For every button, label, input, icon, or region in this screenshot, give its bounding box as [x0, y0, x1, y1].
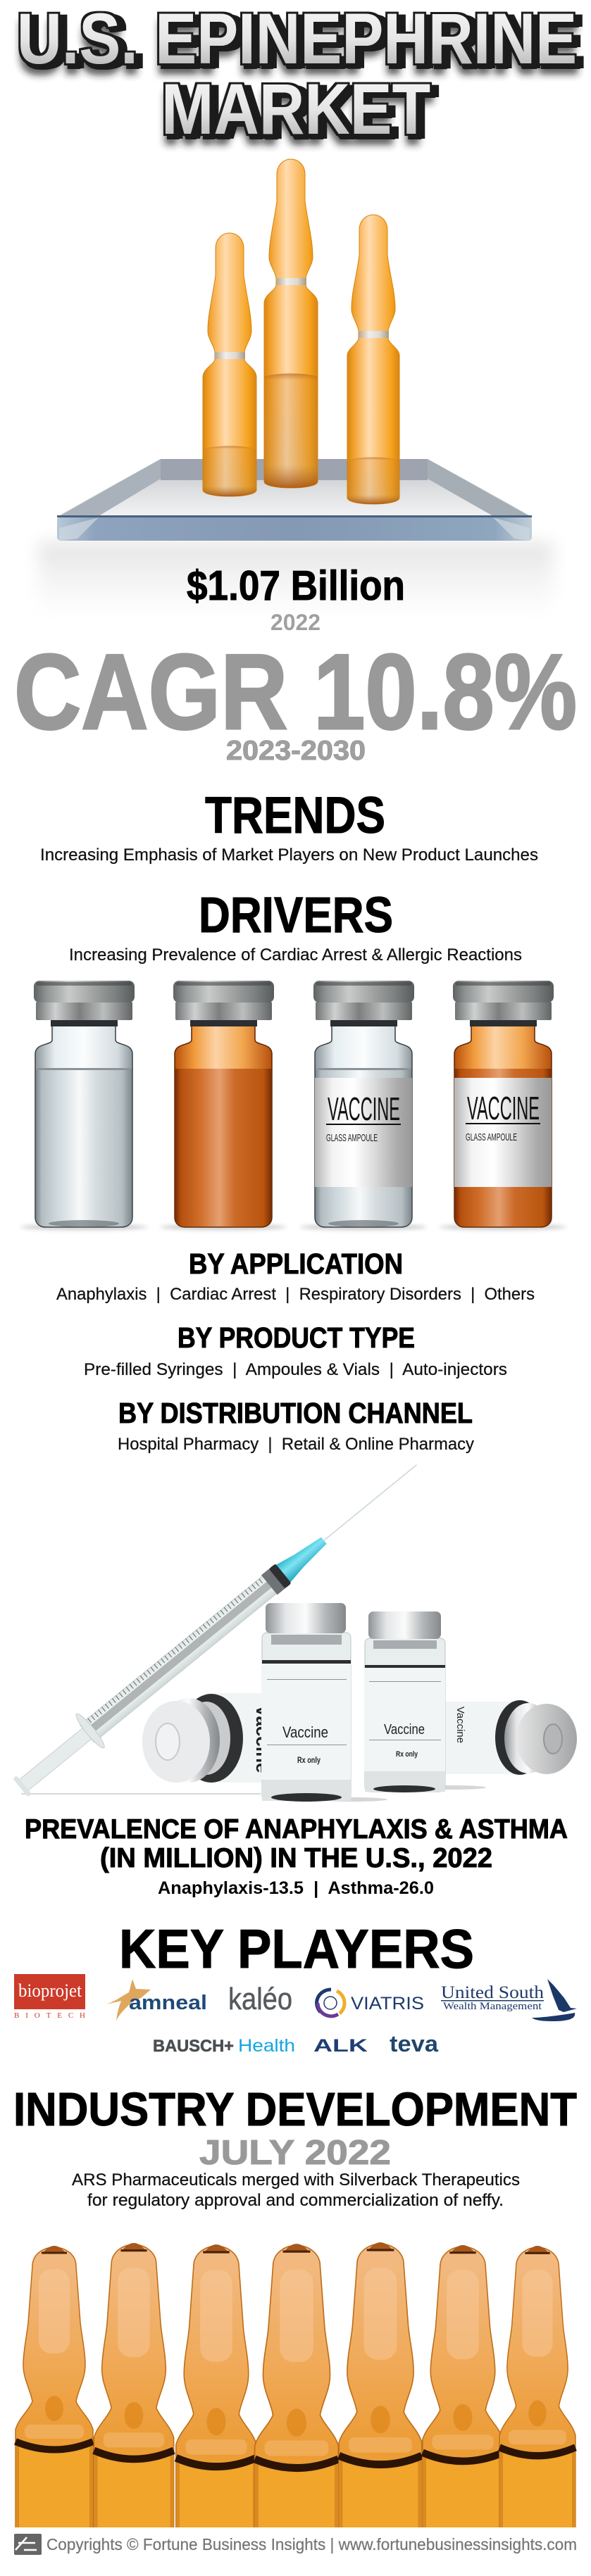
prevalence heading: (IN MILLION) IN THE U.S., 2022	[100, 1843, 492, 1873]
ampoule right	[347, 215, 399, 504]
ampoule 4	[254, 2244, 338, 2527]
logo: bausch health: Health	[238, 2036, 295, 2056]
logo: amneal	[106, 1979, 207, 2021]
by product type list: Pre-filled Syringes | Ampoules & Vials | Auto-injectors	[84, 1360, 507, 1379]
vial standing left: Rx only	[297, 1755, 321, 1765]
footer copyright: Copyrights © Fortune Business Insights | www.fortunebusinessinsights.com	[46, 2535, 577, 2553]
logo: united south: Wealth Management	[443, 2001, 542, 2012]
logo: amneal: amneal	[129, 1992, 207, 2014]
shadow under tray	[39, 542, 553, 616]
ampoule 5	[338, 2242, 423, 2527]
row of amber ampoules	[14, 2242, 577, 2527]
logo: teva: teva	[390, 2031, 438, 2056]
ampoule 7	[498, 2246, 577, 2527]
ground shadows	[21, 1785, 486, 1802]
by application heading: BY APPLICATION	[189, 1248, 403, 1280]
vial standing left	[261, 1603, 351, 1802]
logo: united south: United South	[441, 1983, 545, 2002]
market size value: $1.07 Billion	[187, 563, 405, 609]
logo: alk: ALK	[313, 2036, 368, 2056]
development text: for regulatory approval and commercialization of neffy.	[87, 2191, 504, 2210]
label text: GLASS AMPOULE	[466, 1131, 517, 1143]
logo: united south	[441, 1979, 577, 2021]
development text: ARS Pharmaceuticals merged with Silverback Therapeutics	[72, 2170, 520, 2189]
logo: bioprojet: bioprojet	[18, 1980, 82, 2001]
ampoule left	[203, 233, 256, 496]
logo: bioprojet: BIOTECH	[14, 2011, 85, 2020]
ampoule 2	[92, 2243, 175, 2527]
lying vial right: Vaccine	[454, 1707, 466, 1743]
CAGR period: 2023-2030	[226, 736, 366, 766]
lying vial left	[142, 1693, 273, 1783]
lying vial left: Vaccine	[252, 1705, 273, 1773]
vial standing right	[364, 1611, 445, 1792]
market size year: 2022	[270, 610, 321, 635]
tray	[57, 459, 532, 541]
ampoule middle	[264, 159, 318, 488]
label text: VACCINE	[328, 1091, 400, 1127]
label text	[326, 1091, 401, 1144]
footer logo	[14, 2534, 42, 2555]
by distribution channel list: Hospital Pharmacy | Retail & Online Pharmacy	[118, 1435, 475, 1454]
by product type heading: BY PRODUCT TYPE	[178, 1321, 415, 1354]
by distribution channel heading: BY DISTRIBUTION CHANNEL	[118, 1397, 473, 1429]
logo: kaleo: kaléo	[228, 1982, 292, 2016]
label text: GLASS AMPOULE	[326, 1132, 378, 1144]
syringe	[6, 1448, 430, 1805]
vial: clear	[20, 981, 147, 1230]
by application list: Anaphylaxis | Cardiac Arrest | Respiratory Disorders | Others	[56, 1285, 535, 1304]
trends text: Increasing Emphasis of Market Players on New Product Launches	[40, 846, 538, 865]
vial standing left: Vaccine	[282, 1723, 328, 1741]
development text	[72, 2170, 520, 2210]
label text	[466, 1090, 540, 1143]
prevalence heading	[25, 1814, 568, 1873]
title: MARKET	[161, 69, 430, 149]
development date: JULY 2022	[199, 2134, 391, 2172]
lying vial right	[440, 1700, 577, 1775]
vial: amber with label	[440, 981, 566, 1230]
vial: amber	[160, 981, 287, 1230]
logo: viatris: VIATRIS	[351, 1994, 424, 2013]
trends heading: TRENDS	[205, 787, 385, 844]
drivers text: Increasing Prevalence of Cardiac Arrest & Allergic Reactions	[69, 945, 522, 965]
logo: viatris	[317, 1990, 424, 2016]
key players heading: KEY PLAYERS	[119, 1918, 474, 1980]
logo: bausch health: BAUSCH+	[153, 2037, 234, 2056]
vial standing right: Rx only	[396, 1750, 418, 1759]
vial: clear with label	[300, 981, 427, 1230]
ampoule 3	[175, 2244, 256, 2527]
ampoule 1	[14, 2246, 94, 2527]
drivers heading: DRIVERS	[199, 888, 393, 943]
prevalence figures: Anaphylaxis-13.5 | Asthma-26.0	[158, 1878, 434, 1898]
ampoule 6	[421, 2245, 500, 2527]
logo: bausch health	[153, 2036, 295, 2056]
vial standing right: Vaccine	[384, 1722, 425, 1738]
title	[17, 0, 577, 149]
logo: bioprojet	[14, 1974, 85, 2020]
